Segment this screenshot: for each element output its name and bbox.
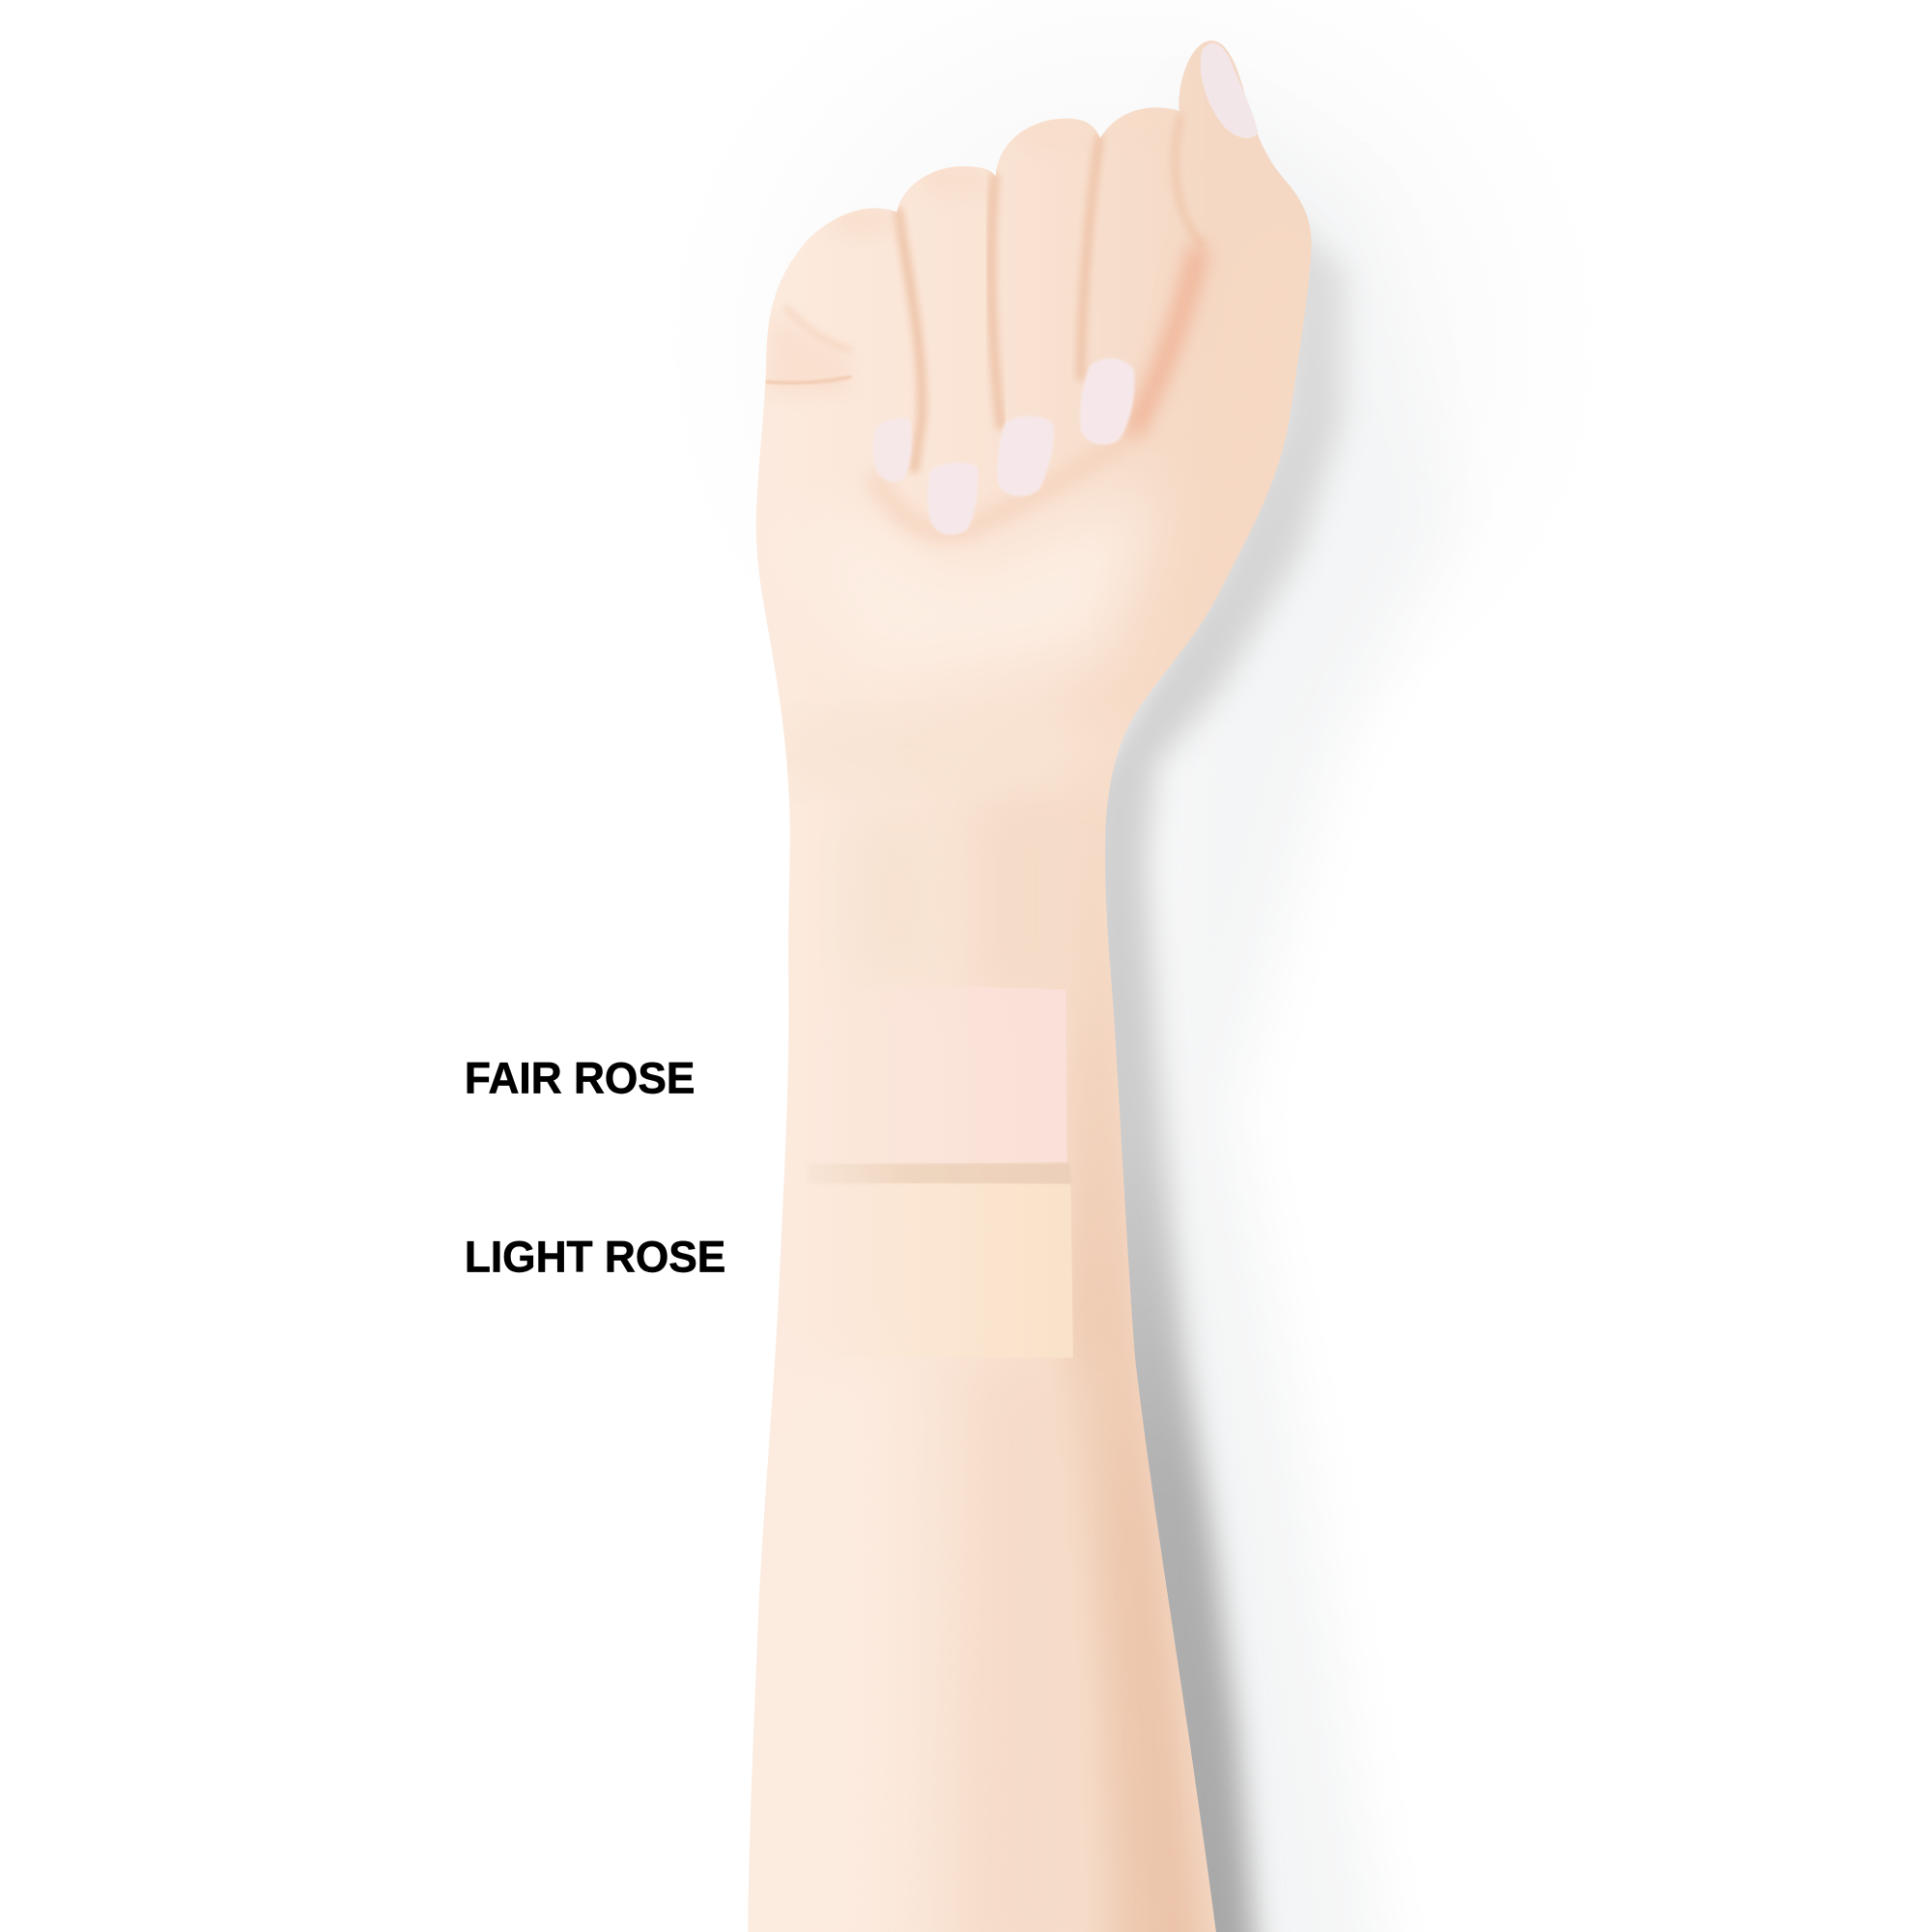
arm and fist [748, 41, 1312, 1932]
nail: thumb [1201, 43, 1258, 138]
hand shading [769, 325, 1150, 663]
arm shadow [777, 25, 1491, 1932]
swatch: light rose [807, 1182, 1073, 1358]
nail: middle finger [927, 463, 978, 535]
knuckle tints [838, 170, 965, 234]
nail: ring finger [997, 415, 1054, 497]
skin base [748, 41, 1312, 1932]
palm fold under fingers [872, 425, 1146, 532]
swatch gap band [807, 1163, 1072, 1184]
finger separators [766, 117, 1202, 469]
nail: little finger [1080, 358, 1134, 444]
label: light rose: LIGHT ROSE [465, 1232, 725, 1281]
label: fair rose: FAIR ROSE [465, 1053, 695, 1102]
swatch: fair rose [802, 985, 1067, 1164]
forearm shading [972, 808, 1211, 1932]
nail: index finger [873, 418, 912, 482]
